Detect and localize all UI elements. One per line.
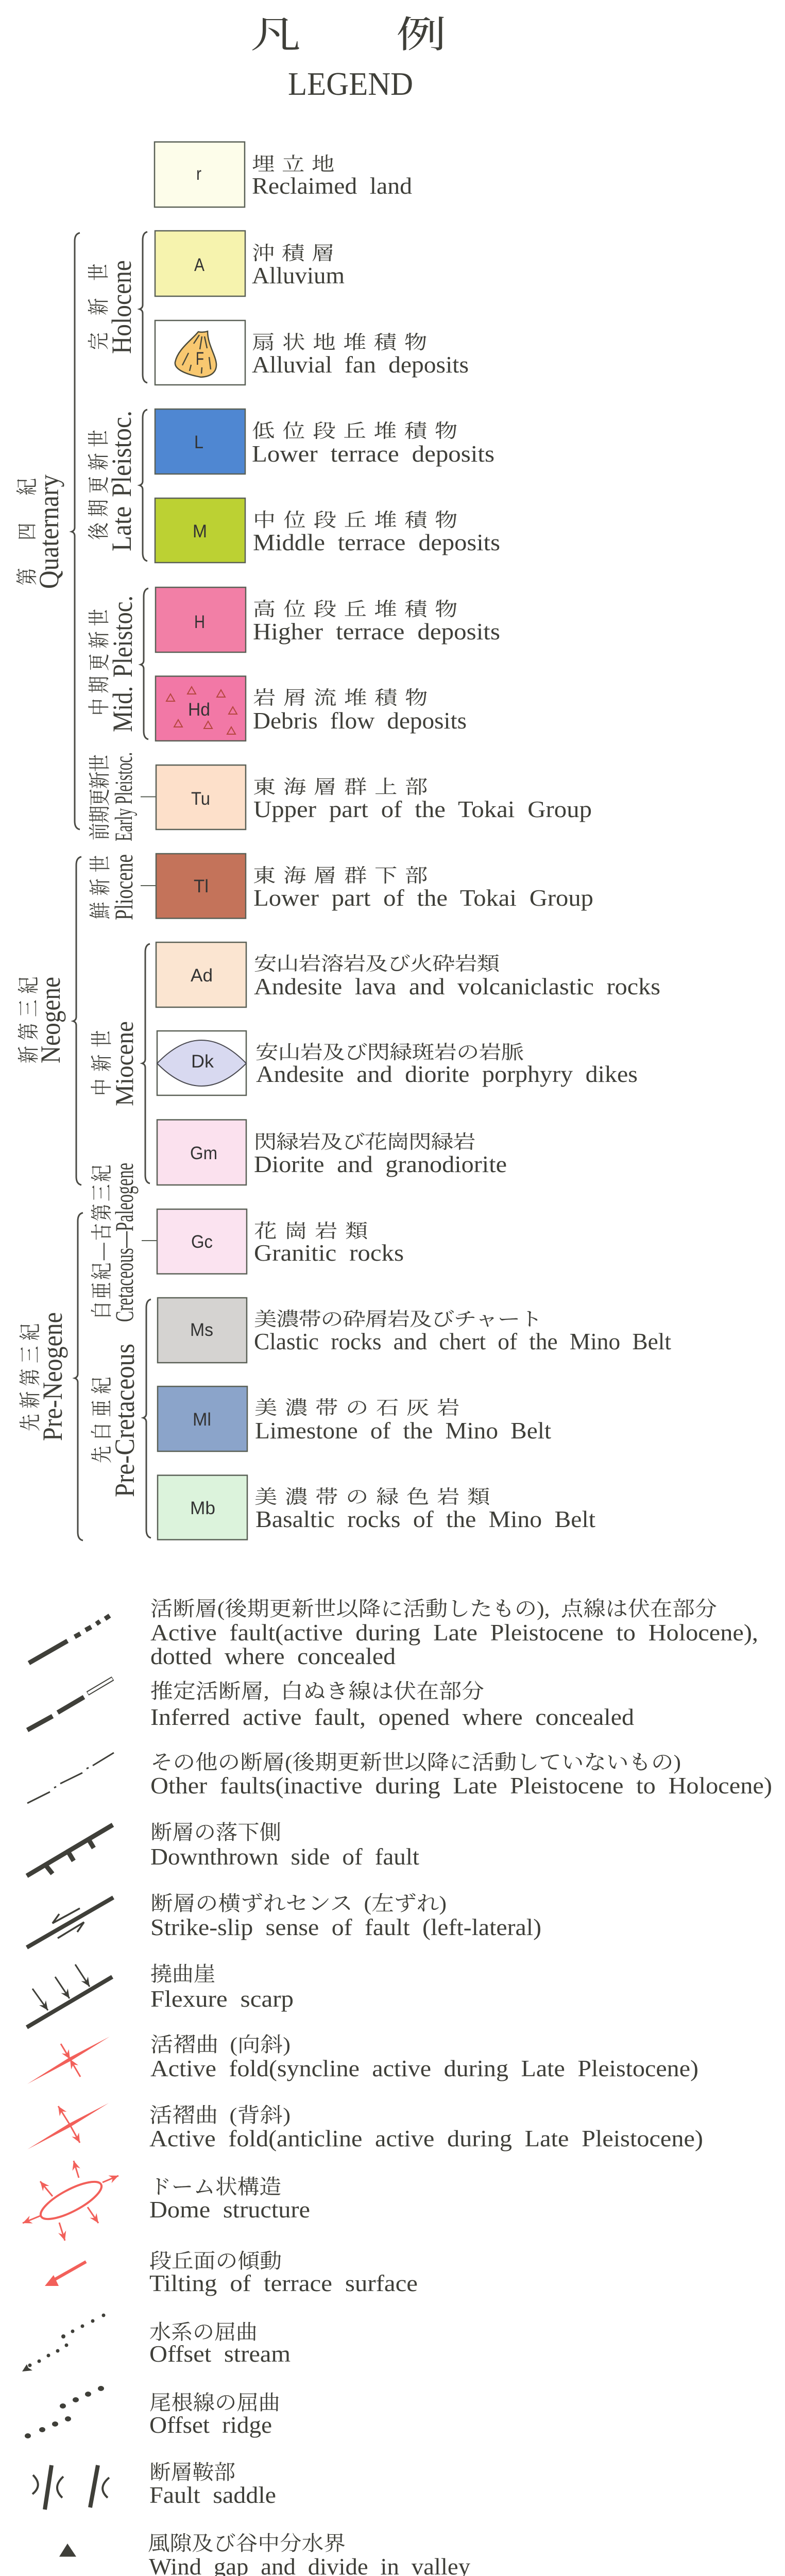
unit: Gm Diorite and granodiorite: 閃緑岩及び花崗閃緑岩 — [254, 1131, 475, 1153]
symbol row: flexure scarp — [27, 1962, 294, 2027]
label: 前期更新世: 前期更新世 — [89, 755, 112, 840]
label: 先新第三紀: 先新第三紀 — [19, 1318, 43, 1431]
unit: F Alluvial fan deposits: Alluvial fan deposits — [252, 351, 469, 378]
icon: dike lens — [157, 1040, 246, 1086]
unit: Mb Basaltic rocks of the Mino Belt: 美濃帯の緑色岩類 — [254, 1486, 498, 1508]
label: Holocene: Holocene — [106, 260, 137, 354]
unit: Dk Andesite and diorite porphyry dikes: Dk — [191, 1052, 214, 1072]
symbol row: fault saddle: Fault saddle — [149, 2482, 276, 2508]
title: 凡例: 凡 — [250, 14, 301, 56]
unit: M Middle terrace deposits: Middle terrace deposits — [253, 529, 500, 555]
icon: alluvial fan — [175, 331, 216, 377]
label: Mid. Pleistoc.: Mid. Pleistoc. — [107, 596, 138, 732]
label: Late Pleistoc.: Late Pleistoc. — [106, 411, 137, 551]
symbol row: strike-slip: Strike-slip sense of fault (left-lateral) — [150, 1914, 541, 1940]
unit: Tl Lower part of the Tokai Group: 東海層群下部 — [253, 865, 435, 887]
label: Pre-Cretaceous: Pre-Cretaceous — [109, 1344, 140, 1497]
unit: Ms Clastic rocks and chert — [158, 1298, 671, 1363]
unit: Ad Andesite lava: Ad — [191, 965, 213, 986]
unit: Gm Diorite and granodiorite: Diorite and granodiorite — [254, 1151, 507, 1177]
title: 凡例: 例 — [396, 14, 447, 56]
symbol row: active fold anticline: 活褶曲 (背斜) — [149, 2104, 291, 2127]
symbol row: active fold syncline — [27, 2033, 698, 2084]
label: 第四紀: 第四紀 — [16, 450, 40, 585]
unit: Tu Upper part of the Tokai Group: Tu — [191, 789, 210, 809]
unit: Hd Debris flow deposits: Debris flow deposits — [253, 707, 467, 734]
icon: active fault line — [29, 1616, 110, 1663]
unit: Ad Andesite lava: 安山岩溶岩及び火砕岩類 — [254, 953, 500, 975]
unit: Tu Upper part of the Tokai Group: 東海層群上部 — [253, 776, 435, 798]
symbol row: tilting of terrace: Tilting of terrace surface — [149, 2270, 418, 2296]
label: 中期更新世: 中期更新世 — [88, 604, 112, 716]
symbol row: downthrown side: Downthrown side of fault — [150, 1843, 419, 1870]
symbol row: active fold syncline: 活褶曲 (向斜) — [150, 2033, 291, 2056]
unit: H Higher terrace deposits — [156, 587, 500, 652]
unit: Gc Granitic rocks — [157, 1209, 404, 1274]
label: Pre-Neogene: Pre-Neogene — [37, 1312, 68, 1441]
unit: Hd Debris flow deposits: 岩屑流堆積物 — [253, 687, 435, 709]
unit: L Lower terrace deposits — [155, 409, 494, 474]
icon: inferred fault line — [27, 1679, 113, 1730]
unit: Ms Clastic rocks and chert: 美濃帯の砕屑岩及びチャート — [254, 1309, 542, 1330]
unit: Dk Andesite and diorite porphyry dikes: 安山岩及び閃緑斑岩の岩脈 — [255, 1042, 524, 1063]
symbol row: dome structure: ドーム状構造 — [149, 2175, 281, 2198]
symbol row: active fold anticline — [27, 2103, 703, 2151]
symbol row: wind gap — [59, 2532, 470, 2576]
unit: Dk Andesite and diorite porphyry dikes — [157, 1031, 638, 1095]
symbol row: fault saddle — [45, 2461, 276, 2510]
symbol row: offset stream — [22, 2313, 291, 2371]
unit: A Alluvium: A — [194, 255, 205, 275]
title: 凡例 — [250, 14, 447, 56]
unit: H Higher terrace deposits: Higher terrace deposits — [253, 618, 500, 645]
unit: A Alluvium — [155, 231, 345, 296]
unit: Tu Upper part of the Tokai Group: Upper part of the Tokai Group — [253, 796, 592, 822]
symbol row: downthrown side — [27, 1821, 419, 1876]
unit: r Reclaimed land — [155, 142, 412, 207]
unit: r Reclaimed land: r — [196, 164, 201, 184]
unit: Mb Basaltic rocks of the Mino Belt: Basaltic rocks of the Mino Belt — [255, 1506, 595, 1532]
icon: triangle — [59, 2544, 76, 2556]
unit: Ml Limestone of the Mino Belt: Ml — [193, 1410, 211, 1430]
symbol row: downthrown side: 断層の落下側 — [150, 1821, 281, 1844]
icon: fault with ticks — [27, 1825, 113, 1876]
unit: Gc Granitic rocks: Gc — [191, 1232, 213, 1252]
symbol row: offset stream: 水系の屈曲 — [149, 2320, 258, 2344]
symbol row: inferred active fault — [27, 1679, 634, 1730]
connector: Granitic rocks — [142, 1240, 157, 1241]
symbol row: other faults: その他の断層(後期更新世以降に活動していないもの) — [150, 1751, 681, 1774]
icon: thin dash-dot fault — [27, 1753, 114, 1803]
label: 後期更新世: 後期更新世 — [88, 424, 111, 540]
pattern: red triangles — [166, 687, 237, 734]
unit: A Alluvium: Alluvium — [252, 262, 345, 289]
unit: Tl Lower part of the Tokai Group: Lower part of the Tokai Group — [253, 885, 593, 911]
bracket: Late Pleistocene — [140, 410, 147, 561]
icon: flexure scarp — [27, 1964, 112, 2027]
unit: L Lower terrace deposits: L — [194, 432, 203, 452]
symbol row: offset stream: Offset stream — [149, 2341, 291, 2367]
connector: Upper Tokai — [141, 796, 156, 798]
symbol row: strike-slip — [27, 1892, 541, 1947]
unit: F Alluvial fan deposits — [155, 320, 469, 385]
unit: Gc Granitic rocks: 花崗岩類 — [254, 1221, 376, 1242]
symbol row: active fault — [29, 1597, 758, 1669]
symbol row: other faults: Other faults(inactive during Late Pleistocene to Holocene) — [150, 1772, 772, 1799]
bracket: Miocene — [142, 944, 150, 1183]
unit: Hd Debris flow deposits — [156, 676, 467, 741]
symbol row: active fold anticline: Active fold(anticline active during Late Pleistocene) — [149, 2125, 703, 2151]
symbol row: offset ridge: Offset ridge — [149, 2412, 272, 2438]
bracket: Pre-Cretaceous — [143, 1299, 151, 1538]
symbol row: wind gap: 風隙及び谷中分水界 — [148, 2532, 346, 2555]
symbol row: tilting of terrace — [45, 2249, 418, 2296]
unit: L Lower terrace deposits: Lower terrace deposits — [252, 440, 494, 467]
label: 鮮新世: 鮮新世 — [89, 849, 113, 919]
unit: Gm Diorite and granodiorite — [157, 1120, 507, 1185]
symbol row: fault saddle: 断層鞍部 — [149, 2461, 235, 2484]
unit: Ml Limestone of the Mino Belt: Limestone of the Mino Belt — [255, 1417, 551, 1444]
panel: geological units — [155, 142, 671, 1539]
unit: Mb Basaltic rocks of the Mino Belt — [158, 1476, 595, 1539]
icon: fault saddle — [45, 2465, 98, 2510]
unit: Ml Limestone of the Mino Belt — [158, 1386, 551, 1451]
symbol row: flexure scarp: Flexure scarp — [150, 1986, 294, 2012]
unit: Ad Andesite lava: Andesite lava and volcaniclastic rocks — [254, 973, 660, 999]
unit: Gm Diorite and granodiorite: Gm — [190, 1143, 217, 1163]
unit: Ml Limestone of the Mino Belt: 美濃帯の石灰岩 — [254, 1397, 467, 1419]
unit: r Reclaimed land: Reclaimed land — [252, 173, 412, 199]
label: Miocene: Miocene — [110, 1021, 139, 1106]
bracket: Holocene — [140, 232, 147, 383]
label: Quaternary: Quaternary — [33, 474, 64, 589]
unit: M Middle terrace deposits — [155, 498, 500, 563]
label: 白亜紀—古第三紀: 白亜紀—古第三紀 — [91, 1162, 114, 1319]
symbol row: active fault: 活断層(後期更新世以降に活動したもの), 点線は伏在部分 — [150, 1597, 717, 1620]
symbol row: tilting of terrace: 段丘面の傾動 — [149, 2249, 282, 2273]
unit: Ad Andesite lava — [156, 942, 660, 1007]
icon: offset ridge dots — [25, 2386, 104, 2438]
icon: saddle arcs — [32, 2475, 109, 2498]
icon: strike-slip fault — [27, 1897, 113, 1947]
symbol row: active fold syncline: Active fold(syncline active during Late Pleistocene) — [150, 2055, 698, 2081]
panel: structural symbols — [22, 1597, 772, 2576]
symbol row: active fault: Active fault(active during Late Pleistocene to Holocene), — [150, 1619, 758, 1646]
unit: Ms Clastic rocks and chert: Ms — [190, 1320, 213, 1340]
unit: A Alluvium: 沖積層 — [252, 243, 342, 264]
icon: alluvial fan: F — [196, 349, 204, 369]
symbol row: strike-slip: 断層の横ずれセンス (左ずれ) — [150, 1892, 447, 1915]
bracket: Quaternary — [72, 233, 80, 829]
unit: Tl Lower part of the Tokai Group — [156, 854, 593, 918]
unit: Tu Upper part of the Tokai Group — [156, 765, 592, 829]
icon: tilt arrow — [45, 2262, 86, 2286]
label: Neogene: Neogene — [35, 977, 66, 1063]
symbol row: dome structure: Dome structure — [149, 2196, 310, 2223]
symbol row: other faults — [27, 1751, 772, 1803]
panel: stratigraphic brackets and era labels — [16, 232, 157, 1540]
unit: Hd Debris flow deposits: Hd — [188, 700, 210, 720]
symbol row: offset ridge — [25, 2386, 280, 2438]
icon: dome — [23, 2161, 118, 2241]
unit: Gc Granitic rocks: Granitic rocks — [254, 1240, 404, 1266]
unit: Mb Basaltic rocks of the Mino Belt: Mb — [190, 1498, 215, 1518]
symbol row: dome structure — [23, 2161, 310, 2241]
symbol row: inferred active fault: 推定活断層, 白ぬき線は伏在部分 — [150, 1680, 484, 1703]
unit: L Lower terrace deposits: 低位段丘堆積物 — [252, 420, 465, 442]
label: 先白亜紀: 先白亜紀 — [91, 1371, 114, 1463]
label: Cretaceous—Paleogene: Cretaceous—Paleogene — [110, 1163, 139, 1322]
label: 完新世: 完新世 — [88, 246, 111, 350]
icon: offset stream dots — [22, 2313, 105, 2371]
bracket: Middle Pleistocene — [141, 588, 148, 739]
unit: Tl Lower part of the Tokai Group: Tl — [194, 876, 209, 896]
unit: Dk Andesite and diorite porphyry dikes: Andesite and diorite porphyry dikes — [256, 1061, 638, 1087]
symbol row: active fault: dotted where concealed — [150, 1643, 396, 1669]
bracket: Neogene — [73, 857, 81, 1185]
label: 中新世: 中新世 — [91, 1023, 114, 1096]
unit: H Higher terrace deposits: 高位段丘堆積物 — [253, 599, 465, 620]
symbol row: flexure scarp: 撓曲崖 — [150, 1962, 215, 1986]
unit: F Alluvial fan deposits: 扇状地堆積物 — [252, 332, 435, 353]
unit: r Reclaimed land: 埋立地 — [252, 154, 342, 175]
icon: anticline — [27, 2103, 109, 2149]
icon: syncline — [27, 2037, 110, 2084]
symbol row: offset ridge: 尾根線の屈曲 — [149, 2391, 280, 2414]
unit: H Higher terrace deposits: H — [194, 612, 205, 632]
unit: M Middle terrace deposits: 中位段丘堆積物 — [253, 510, 465, 531]
unit: M Middle terrace deposits: M — [193, 521, 207, 541]
connector: Lower Tokai — [141, 885, 156, 886]
label: 新第三紀: 新第三紀 — [18, 971, 41, 1063]
symbol row: inferred active fault: Inferred active fault, opened where concealed — [150, 1704, 634, 1730]
label: Pliocene: Pliocene — [109, 854, 138, 920]
label: Early Pleistoc.: Early Pleistoc. — [110, 752, 138, 841]
title: LEGEND: LEGEND — [288, 66, 413, 102]
unit: Ms Clastic rocks and chert: Clastic rocks and chert of the Mino Belt — [254, 1328, 671, 1354]
bracket: Pre-Neogene — [75, 1213, 83, 1540]
